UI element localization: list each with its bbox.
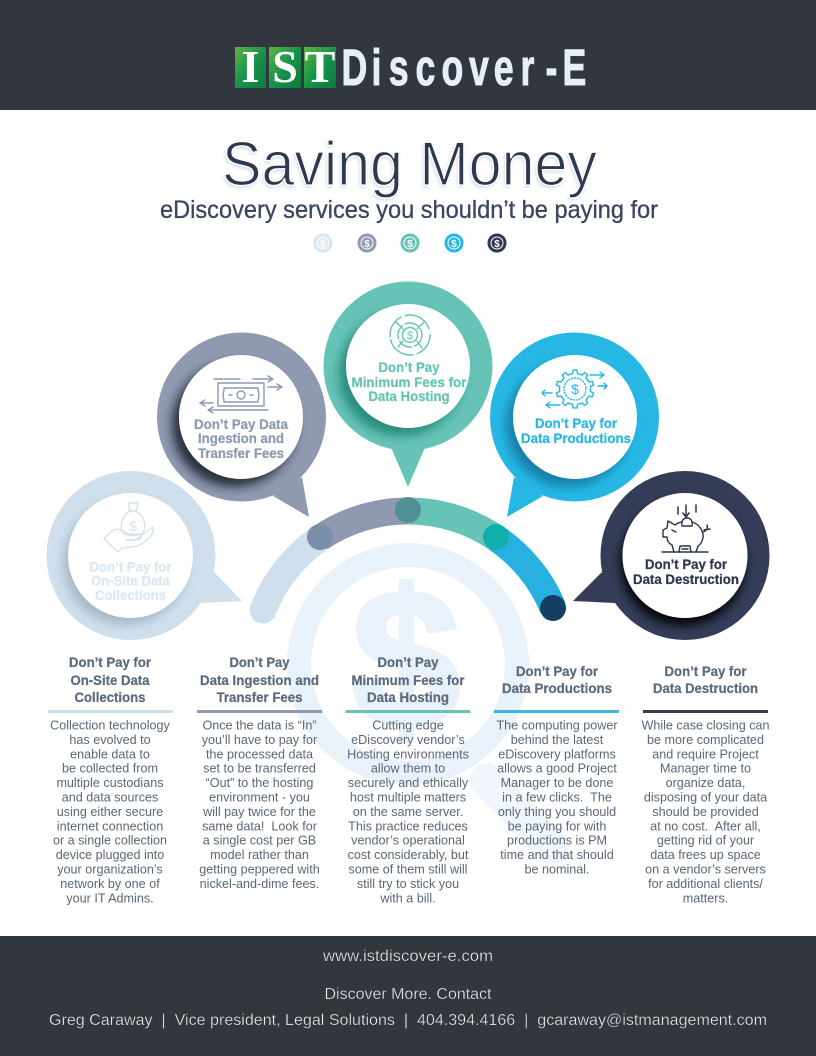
column heading: Don’t Pay for	[516, 663, 599, 679]
column body text: matters.	[683, 891, 728, 905]
column body text: allows a good Project	[497, 762, 617, 776]
bubble: minimum fees for data hosting	[324, 282, 492, 487]
column body text: getting rid of your	[657, 834, 754, 848]
coin icon row: $	[451, 239, 457, 250]
header bar	[0, 0, 816, 110]
column heading	[653, 663, 758, 696]
bubble label: Ingestion and	[198, 430, 284, 446]
column body text: This practice reduces	[348, 819, 468, 833]
icon: banknote with arrows	[200, 376, 282, 413]
column body text: or a single collection	[53, 834, 167, 848]
bubble label: Don’t Pay	[378, 359, 440, 375]
column body text: set to be transferred	[203, 762, 316, 776]
column body text: at no cost. After all,	[650, 819, 761, 833]
column body text: in a few clicks. The	[502, 790, 612, 804]
icon: money bag on hand	[104, 503, 153, 552]
coin icon row: $	[364, 239, 370, 250]
column body text: for additional clients/	[648, 877, 763, 891]
progress arc	[263, 497, 566, 621]
coin icon row	[315, 235, 505, 251]
column body text: disposing of your data	[644, 790, 767, 804]
column body text: Cutting edge	[372, 718, 444, 732]
column body text: cost considerably, but	[348, 848, 469, 862]
bubble: data ingestion and transfer fees	[157, 332, 326, 517]
column: on-site data collections	[48, 654, 173, 905]
icon: segmented dollar dial: $	[407, 330, 413, 342]
column body text: “Out” to the hosting	[206, 776, 313, 790]
icon: gear with dollar and arrows: $	[571, 381, 579, 397]
icon: segmented dollar dial	[390, 315, 430, 355]
footer website: www.istdiscover-e.com	[322, 948, 493, 965]
bubble label	[633, 556, 739, 587]
column heading: Don’t Pay	[378, 654, 439, 670]
column body text: your organization’s	[57, 862, 163, 876]
coin icon row: $	[320, 239, 326, 250]
column body text: environment - you	[209, 790, 310, 804]
icon: piggy bank	[662, 505, 710, 552]
column body text: model rather than	[210, 848, 309, 862]
footer	[0, 936, 816, 1056]
bubble label: On-Site Data	[91, 572, 170, 588]
logo: IST Discover-E: Discover-E	[342, 40, 586, 97]
column body text: you’ll have to pay for	[202, 733, 317, 747]
column heading: On-Site Data	[70, 672, 150, 688]
column body text: getting peppered with	[199, 862, 320, 876]
bubble: data destruction	[573, 471, 770, 640]
icon: gear with dollar and arrows	[542, 370, 607, 408]
bubble label: Don’t Pay for	[535, 415, 618, 431]
column body text: network by one of	[60, 877, 160, 891]
column body text: with a bill.	[379, 891, 436, 905]
column body text: internet connection	[57, 819, 163, 833]
column body text: be paying for with	[508, 819, 606, 833]
footer contact line: Greg Caraway | Vice president, Legal Solutions | 404.394.4166 | gcaraway@istmanagement.com	[49, 1012, 767, 1029]
column body text: has evolved to	[69, 733, 151, 747]
column body text: Hosting environments	[347, 747, 469, 761]
column body text: The computing power	[496, 718, 618, 732]
column body text: a single cost per GB	[203, 834, 316, 848]
column body text	[50, 718, 171, 905]
column body text: host multiple matters	[350, 790, 466, 804]
bubble label	[521, 415, 631, 446]
column body text: multiple custodians	[56, 776, 164, 790]
column body text: your IT Admins.	[66, 891, 154, 905]
column body text: be collected from	[62, 762, 158, 776]
column body text: on the same server.	[353, 805, 463, 819]
bubble label: Don’t Pay Data	[194, 416, 288, 432]
column body text: and data sources	[62, 790, 158, 804]
bubble label: Data Destruction	[633, 571, 739, 587]
logo: IST Discover-E	[235, 40, 586, 97]
watermark: dollar magnifier	[299, 550, 552, 848]
watermark: dollar magnifier: $	[352, 550, 460, 768]
footer call to action: Discover More. Contact	[324, 986, 492, 1003]
column heading	[200, 654, 319, 705]
column body text: same data! Look for	[202, 819, 317, 833]
column heading	[69, 654, 152, 705]
column body text: time and that should	[500, 848, 614, 862]
logo: IST Discover-E: T	[305, 41, 335, 92]
column body text: the processed data	[206, 747, 313, 761]
column: data productions	[494, 663, 619, 876]
bubble label: Transfer Fees	[198, 445, 284, 461]
title: Saving Money	[222, 130, 597, 199]
bubble label	[90, 558, 172, 603]
column heading: Don’t Pay	[230, 654, 290, 670]
column body text: data frees up space	[650, 848, 761, 862]
coin icon row: $	[407, 239, 413, 250]
column heading: Minimum Fees for	[352, 672, 465, 688]
column heading: Collections	[74, 689, 146, 705]
column body text: Collection technology	[50, 718, 171, 732]
column body text: Manager time to	[660, 762, 751, 776]
bubble label	[352, 359, 467, 404]
column heading: Transfer Fees	[216, 689, 303, 705]
column body text: eDiscovery platforms	[498, 747, 616, 761]
column body text: some of them still will	[349, 862, 467, 876]
column body text: productions is PM	[507, 834, 607, 848]
column body text: vendor’s operational	[351, 834, 465, 848]
bubble label: Don’t Pay for	[90, 558, 172, 574]
column body text: behind the latest	[511, 733, 604, 747]
bubble label: Don’t Pay for	[645, 556, 728, 572]
column body text	[496, 718, 618, 876]
column body text: should be provided	[652, 805, 759, 819]
column heading	[502, 663, 612, 696]
column heading: Don’t Pay for	[69, 654, 152, 670]
column: data destruction	[641, 663, 770, 905]
column body text: and require Project	[652, 747, 759, 761]
column body text: organize data,	[666, 776, 745, 790]
column body text: be more complicated	[647, 733, 764, 747]
column body text: allow them to	[371, 762, 445, 776]
column heading: Don’t Pay for	[664, 663, 747, 679]
bubble label: Collections	[95, 587, 166, 603]
subtitle: eDiscovery services you shouldn’t be paying for	[160, 196, 658, 224]
bubble label: Data Hosting	[368, 388, 450, 404]
column body text	[641, 718, 770, 905]
column body text: While case closing can	[641, 718, 770, 732]
column body text: Manager to be done	[501, 776, 613, 790]
column body text: securely and ethically	[348, 776, 469, 790]
column body text: using either secure	[57, 805, 163, 819]
column: data ingestion and transfer fees	[197, 654, 322, 891]
bubble label	[194, 416, 288, 461]
bubble: on-site data collections	[46, 471, 242, 640]
column body text: device plugged into	[56, 848, 164, 862]
bubble: data productions	[490, 332, 659, 517]
column heading: Data Ingestion and	[200, 672, 319, 688]
column heading: Data Hosting	[367, 689, 449, 705]
logo: IST Discover-E: S	[272, 41, 298, 92]
bubble label: Minimum Fees for	[352, 374, 467, 390]
coin icon row: $	[494, 239, 500, 250]
column body text	[199, 718, 320, 891]
column body text: Once the data is “In”	[202, 718, 317, 732]
column heading: Data Productions	[502, 680, 612, 696]
column body text: only thing you should	[498, 805, 616, 819]
column heading	[352, 654, 465, 705]
bubble label: Data Productions	[521, 430, 631, 446]
column body text: on a vendor’s servers	[645, 862, 766, 876]
column body text: will pay twice for the	[202, 805, 316, 819]
logo: IST Discover-E: I	[242, 41, 259, 92]
column heading: Data Destruction	[653, 680, 758, 696]
column body text: nickel-and-dime fees.	[200, 877, 319, 891]
column body text: be nominal.	[524, 862, 590, 876]
column body text: eDiscovery vendor’s	[351, 733, 465, 747]
column body text: still try to stick you	[357, 877, 459, 891]
icon: money bag on hand: $	[129, 518, 137, 534]
column body text: enable data to	[70, 747, 150, 761]
column: minimum fees for data hosting	[346, 654, 470, 905]
column body text	[347, 718, 469, 905]
